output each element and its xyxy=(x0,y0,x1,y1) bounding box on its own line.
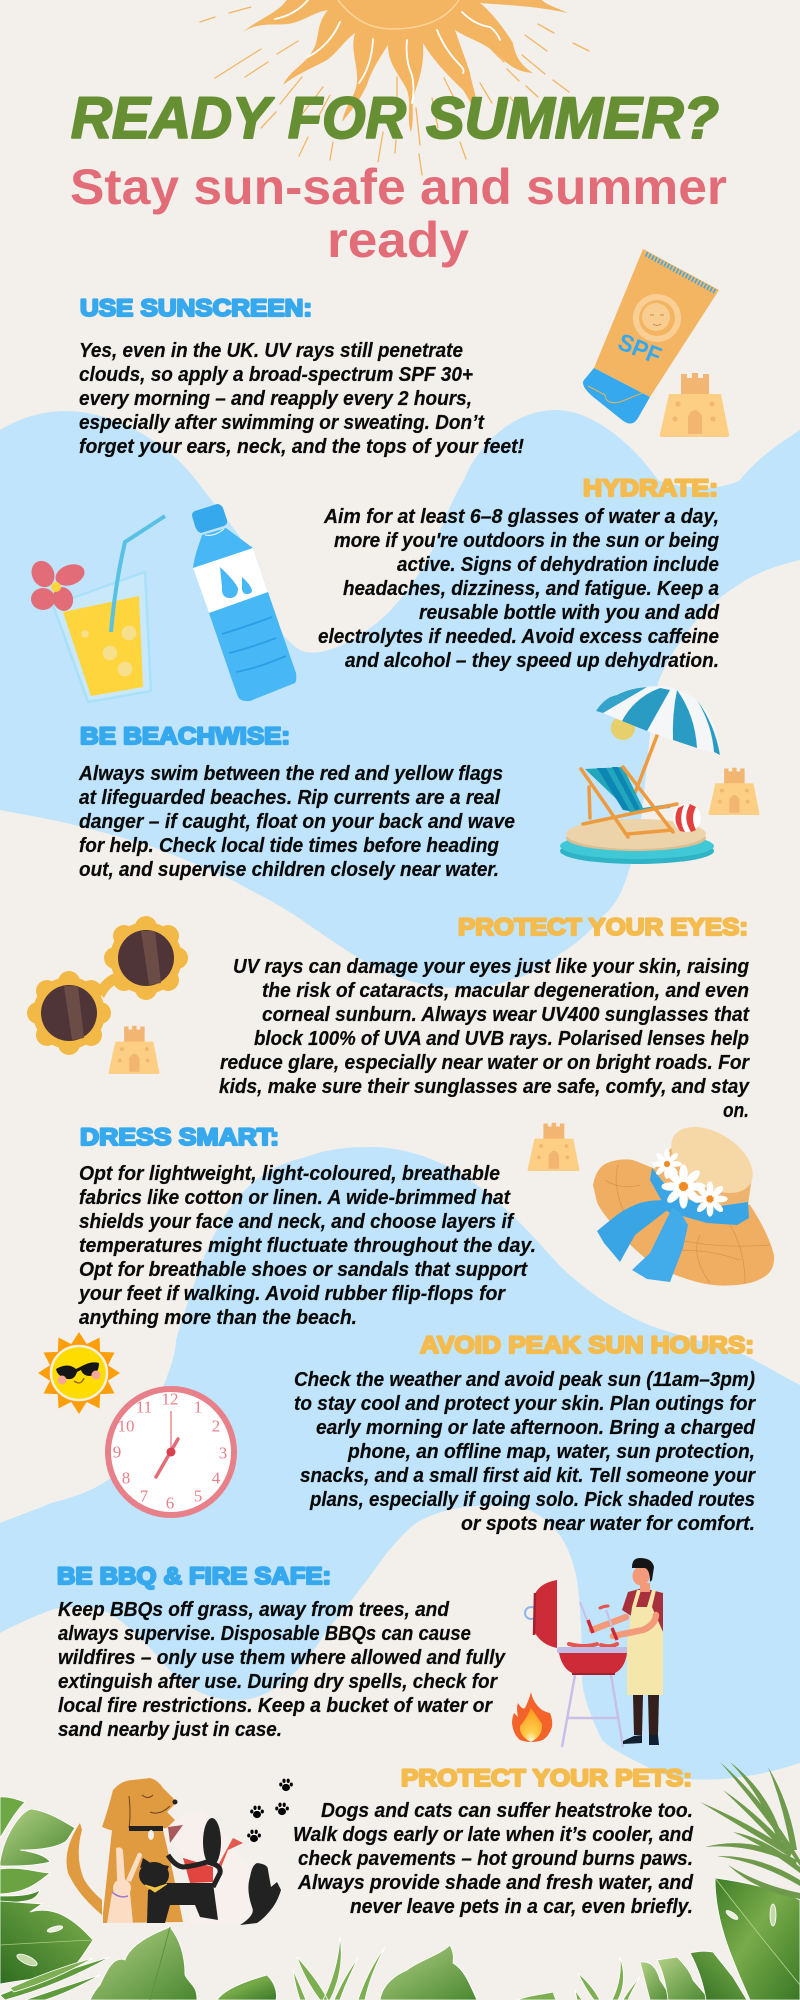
text block: dress smart: temperatures might fluctuate throughout the day. xyxy=(79,1235,536,1257)
icon: water bottle xyxy=(192,504,296,701)
panel: be beachwise xyxy=(78,686,759,881)
title: FOR xyxy=(288,86,406,151)
panel: dress smart xyxy=(78,1113,774,1329)
text block: use sunscreen xyxy=(79,340,524,458)
heading: protect your pets: PROTECT YOUR PETS: xyxy=(401,1765,692,1792)
icon: clock: 1 xyxy=(194,1398,202,1416)
blue background blob: upper xyxy=(0,410,800,989)
title: SUMMER? xyxy=(426,86,719,151)
heading: avoid peak sun hours: AVOID PEAK SUN HOURS: xyxy=(420,1332,754,1359)
text block: be beachwise xyxy=(78,763,515,881)
text block: dress smart: anything more than the beach. xyxy=(79,1307,357,1329)
heading: be beachwise: BE BEACHWISE: xyxy=(80,723,290,750)
icon: clock: 2 xyxy=(212,1416,220,1436)
icon: clock xyxy=(108,1389,234,1515)
text block: hydrate: electrolytes if needed. Avoid excess caffeine xyxy=(318,626,719,648)
text block: be beachwise: danger – if caught, float on your back and wave xyxy=(79,811,515,833)
icon: sand castle xyxy=(709,768,759,815)
text block: be bbq and fire safe: extinguish after use. During dry spells, check for xyxy=(58,1671,498,1693)
subtitle: Stay sun-safe and summer xyxy=(70,159,727,215)
icon: sand castle xyxy=(660,373,729,437)
icon: group of pets xyxy=(66,1778,281,1925)
icon: clock: 7 xyxy=(140,1486,149,1506)
text block: protect your eyes xyxy=(219,956,750,1122)
panel: be bbq and fire safe xyxy=(57,1558,663,1747)
icon: sand castle xyxy=(109,1026,159,1074)
icon: sand castle xyxy=(528,1123,579,1171)
text block: be beachwise: for help. Check local tide times before heading xyxy=(79,835,499,857)
text block: protect your pets: Always provide shade and fresh water, and xyxy=(297,1872,694,1894)
text block: use sunscreen: every morning – and reapply every 2 hours, xyxy=(79,388,472,410)
text block: protect your pets: never leave pets in a car, even briefly. xyxy=(350,1896,693,1918)
text block: avoid peak sun hours: Check the weather and avoid peak sun (11am–3pm) xyxy=(294,1369,755,1391)
icon: clock: 3 xyxy=(219,1444,227,1462)
heading: dress smart: DRESS SMART: xyxy=(80,1124,279,1151)
text block: avoid peak sun hours: early morning or late afternoon. Bring a charged xyxy=(316,1417,756,1439)
icon: clock: 9 xyxy=(113,1442,121,1462)
text block: protect your eyes: UV rays can damage your eyes just like your skin, raising xyxy=(233,956,749,978)
text block: avoid peak sun hours: or spots near water for comfort. xyxy=(461,1513,755,1535)
icon: flame xyxy=(512,1692,552,1742)
text block: hydrate: more if you're outdoors in the sun or being xyxy=(334,530,719,552)
icon: sunscreen tube xyxy=(583,249,719,424)
text block: dress smart: Opt for lightweight, light-coloured, breathable xyxy=(79,1163,500,1185)
panel: use sunscreen xyxy=(79,249,729,458)
text block: dress smart: Opt for breathable shoes or sandals that support xyxy=(79,1259,528,1281)
panel: hydrate xyxy=(27,475,720,702)
text block: hydrate: reusable bottle with you and add xyxy=(419,602,720,624)
heading: be bbq and fire safe: BE BBQ & FIRE SAFE: xyxy=(57,1563,331,1590)
text block: protect your eyes: block 100% of UVA and UVB rays. Polarised lenses help xyxy=(254,1028,749,1050)
icon: clock: 11 xyxy=(136,1398,152,1416)
text block: avoid peak sun hours: phone, an offline map, water, sun protection, xyxy=(347,1441,755,1463)
icon: clock: 10 xyxy=(118,1416,134,1436)
text block: protect your pets: Dogs and cats can suffer heatstroke too. xyxy=(321,1800,693,1822)
text block: be beachwise: out, and supervise children closely near water. xyxy=(79,859,499,881)
text block: protect your eyes: corneal sunburn. Always wear UV400 sunglasses that xyxy=(262,1004,750,1026)
icon: juice glass with flower xyxy=(27,516,165,702)
subtitle xyxy=(70,159,727,268)
icon: sunscreen tube: SPF xyxy=(614,329,665,370)
text block: protect your pets xyxy=(293,1800,694,1918)
text block: protect your eyes: reduce glare, especially near water or on bright roads. For xyxy=(220,1052,750,1074)
text block: hydrate xyxy=(318,506,720,672)
icon: straw sun hat xyxy=(593,1113,774,1286)
tropical leaves: palm frond xyxy=(700,1762,800,1899)
tropical leaves: bottom left xyxy=(0,1797,110,2000)
text block: be beachwise: at lifeguarded beaches. Rip currents are a real xyxy=(79,787,500,809)
text block: protect your eyes: kids, make sure their sunglasses are safe, comfy, and stay xyxy=(219,1076,750,1098)
icon: man at barbecue xyxy=(525,1558,663,1747)
text block: be bbq and fire safe xyxy=(58,1599,506,1741)
heading: hydrate: HYDRATE: xyxy=(583,475,718,502)
text block: use sunscreen: clouds, so apply a broad-spectrum SPF 30+ xyxy=(79,364,473,386)
icon: sunflower sunglasses xyxy=(27,916,188,1055)
text block: hydrate: Aim for at least 6–8 glasses of water a day, xyxy=(323,506,719,528)
panel: avoid peak sun hours xyxy=(38,1332,756,1535)
text block: protect your pets: check pavements – hot ground burns paws. xyxy=(298,1848,693,1870)
tropical leaves: bottom centre xyxy=(90,1927,477,2000)
text block: hydrate: headaches, dizziness, and fatigue. Keep a xyxy=(343,578,719,600)
title xyxy=(71,86,719,151)
text block: use sunscreen: especially after swimming or sweating. Don’t xyxy=(79,412,485,434)
text block: dress smart xyxy=(78,1163,536,1329)
text block: be beachwise: Always swim between the red and yellow flags xyxy=(78,763,503,785)
title: READY xyxy=(71,86,275,151)
icon: clock: 5 xyxy=(194,1486,202,1506)
text block: hydrate: active. Signs of dehydration include xyxy=(397,554,719,576)
text block: be bbq and fire safe: Keep BBQs off grass, away from trees, and xyxy=(58,1599,450,1621)
icon: sun at top of page xyxy=(200,0,589,175)
icon: clock: 4 xyxy=(212,1468,221,1488)
text block: hydrate: and alcohol – they speed up dehydration. xyxy=(345,650,719,672)
text block: dress smart: shields your face and neck, and choose layers if xyxy=(79,1211,515,1233)
panel: protect your eyes xyxy=(27,914,750,1122)
text block: be bbq and fire safe: always supervise. Disposable BBQs can cause xyxy=(58,1623,471,1645)
text block: be bbq and fire safe: local fire restrictions. Keep a bucket of water or xyxy=(58,1695,493,1717)
icon: clock: 6 xyxy=(166,1494,174,1512)
text block: use sunscreen: forget your ears, neck, and the tops of your feet! xyxy=(79,436,524,458)
icon: beach umbrella, deckchair and ball xyxy=(560,686,720,864)
icon: clock: 12 xyxy=(162,1390,178,1408)
panel: protect your pets xyxy=(66,1765,694,1925)
text block: be bbq and fire safe: wildfires – only use them where allowed and fully xyxy=(58,1647,506,1669)
text block: be bbq and fire safe: sand nearby just in case. xyxy=(58,1719,282,1741)
text block: avoid peak sun hours: plans, especially if going solo. Pick shaded routes xyxy=(309,1489,755,1511)
icon: paw prints xyxy=(247,1779,293,1842)
heading: protect your eyes: PROTECT YOUR EYES: xyxy=(458,914,748,941)
text block: avoid peak sun hours xyxy=(294,1369,756,1535)
text block: protect your pets: Walk dogs early or late when it’s cooler, and xyxy=(293,1824,694,1846)
heading: use sunscreen: USE SUNSCREEN: xyxy=(80,295,312,322)
icon: clock: 8 xyxy=(122,1468,130,1488)
text block: avoid peak sun hours: to stay cool and protect your skin. Plan outings for xyxy=(294,1393,756,1415)
text block: avoid peak sun hours: snacks, and a small first aid kit. Tell someone your xyxy=(300,1465,756,1487)
text block: protect your eyes: the risk of cataracts, macular degeneration, and even xyxy=(262,980,749,1002)
icon: sun with sunglasses xyxy=(38,1332,120,1414)
text block: dress smart: fabrics like cotton or linen. A wide-brimmed hat xyxy=(79,1187,511,1209)
text block: use sunscreen: Yes, even in the UK. UV rays still penetrate xyxy=(79,340,463,362)
text block: protect your eyes: on. xyxy=(723,1100,749,1122)
tropical leaves: bottom right xyxy=(517,1878,800,2000)
text block: dress smart: your feet if walking. Avoid rubber flip-flops for xyxy=(78,1283,506,1305)
subtitle: ready xyxy=(327,212,469,268)
blue background blob: lower xyxy=(0,1147,800,1780)
